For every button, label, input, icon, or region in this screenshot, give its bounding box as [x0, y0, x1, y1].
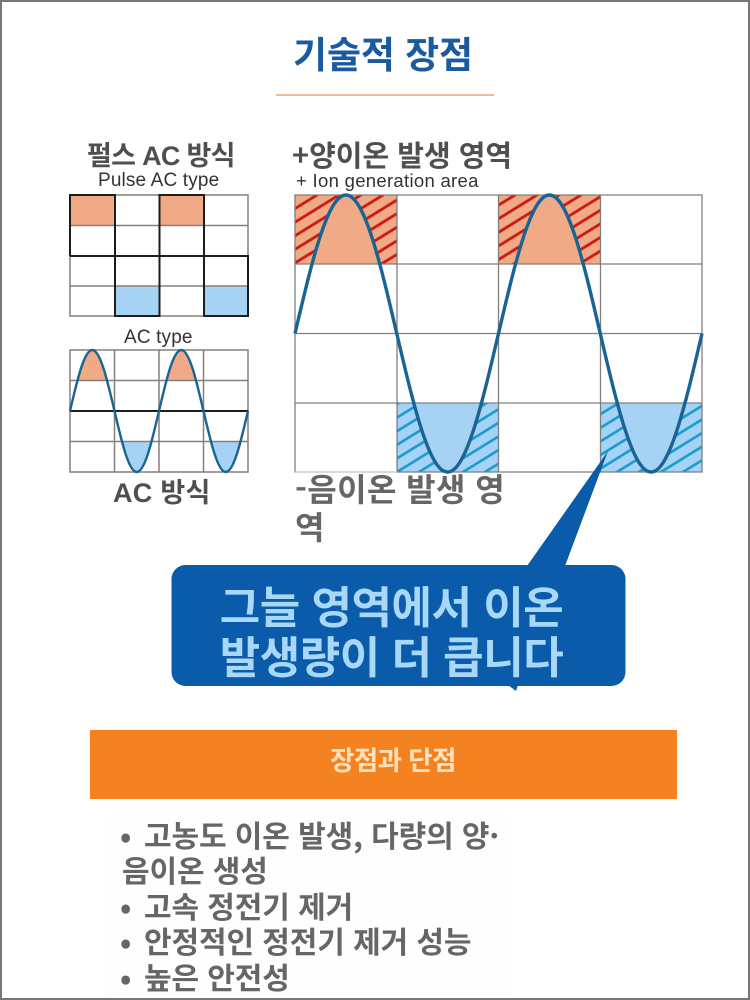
- advantages text: 높은 안전성: [144, 954, 290, 998]
- label: + Ion generation area: + Ion generation area: [296, 170, 479, 191]
- advantages text: •: [120, 918, 131, 962]
- advantages text: 안정적인 정전기 제거 성능: [144, 918, 471, 962]
- heading: negative ion area: -음이온 발생 영: [295, 465, 505, 511]
- advantages text: 고속 정전기 제거: [144, 883, 353, 927]
- label: Pulse AC type: Pulse AC type: [98, 170, 219, 191]
- advantages text: 고농도 이온 발생, 다량의 양·: [144, 812, 499, 856]
- panel: advantages list: [108, 812, 510, 998]
- heading: negative ion area: [295, 465, 505, 549]
- callout text: 발생량이 더 큽니다: [220, 622, 563, 686]
- advantages text: [120, 812, 499, 998]
- heading: AC: AC 방식: [113, 478, 211, 508]
- panel heading: 장점과 단점: [330, 739, 456, 778]
- advantages text: •: [120, 812, 131, 856]
- title: 기술적 장점: [293, 25, 473, 79]
- advantages text: •: [120, 954, 131, 998]
- heading: pulse AC: 펄스 AC 방식: [87, 141, 235, 171]
- advantages text: •: [120, 883, 131, 927]
- heading: positive ion area: +양이온 발생 영역: [292, 133, 512, 175]
- panel: orange header: [90, 730, 677, 799]
- chart: pulse AC grid: [68, 193, 704, 691]
- title underline: [276, 94, 494, 96]
- chart: ion generation sine wave: [295, 195, 702, 472]
- callout bubble: [172, 451, 626, 691]
- chart: AC sine grid: [70, 350, 248, 472]
- label: AC type: AC type: [124, 327, 193, 348]
- callout text: [220, 572, 563, 686]
- callout text: 그늘 영역에서 이온: [220, 572, 563, 636]
- heading: negative ion area: 역: [295, 503, 325, 549]
- advantages text: 음이온 생성: [122, 847, 268, 891]
